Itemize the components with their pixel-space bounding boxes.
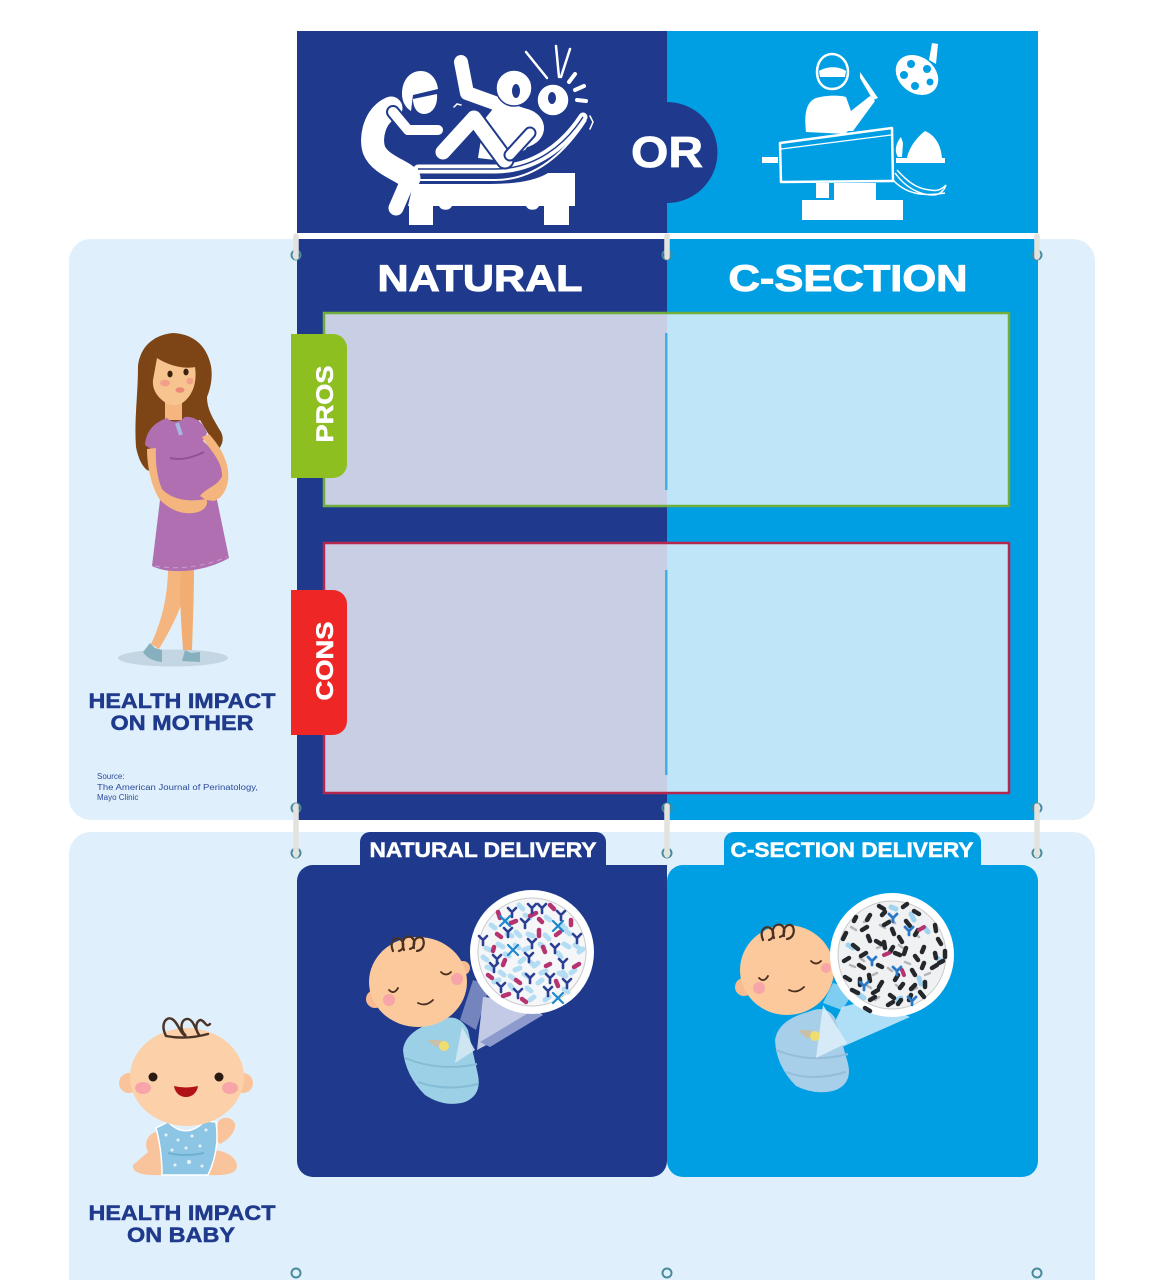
rings: [292, 236, 1042, 1278]
ear: [735, 978, 753, 996]
illustration: c-section delivery baby with microbiome: [735, 893, 954, 1092]
panel: health impact on baby: [69, 832, 1095, 1280]
ear: [366, 990, 384, 1008]
hair back: [135, 333, 223, 476]
magnifier beam: [460, 980, 490, 1030]
tab: natural delivery: [360, 832, 606, 865]
heading: health impact on baby: ON BABY: [127, 1223, 235, 1247]
body panel: c-section column: [667, 239, 1038, 820]
head: [369, 937, 467, 1027]
body panel: natural column: [297, 239, 667, 820]
source text: [97, 772, 258, 802]
tab: c-section delivery: C-SECTION DELIVERY: [730, 839, 974, 862]
shoes: [143, 643, 200, 662]
heading: c-section: C-SECTION: [728, 258, 968, 299]
midwife: [373, 71, 438, 208]
swaddle: [403, 1018, 479, 1104]
source text: Source:: [97, 772, 125, 781]
head: [740, 925, 834, 1015]
curls: [164, 1018, 210, 1038]
white band under header: [297, 233, 1038, 238]
pain rays: [454, 46, 593, 129]
arms: [147, 448, 207, 513]
mother in labour: [443, 62, 569, 160]
surgical drape screen: [780, 128, 893, 182]
source text: Mayo Clinic: [97, 793, 138, 802]
safety pin: [798, 1030, 816, 1038]
light microbes: [483, 905, 583, 1000]
light microbes: [848, 907, 941, 1000]
header panel: natural: [297, 31, 667, 233]
card: natural delivery: [297, 865, 667, 1177]
microscope lens: [470, 890, 594, 1014]
face: [389, 972, 451, 1004]
face: [148, 1072, 158, 1082]
heading: natural: NATURAL: [378, 258, 582, 299]
microscope lens: [830, 893, 954, 1017]
shadow: [118, 650, 228, 666]
source text: The American Journal of Perinatology,: [97, 783, 258, 792]
OR badge: [631, 102, 718, 203]
tab: cons: CONS: [312, 622, 339, 700]
legs: [151, 566, 190, 649]
head: [130, 1028, 244, 1126]
ears: [119, 1073, 139, 1093]
onesie: [156, 1121, 217, 1175]
icon: natural birth: [373, 46, 593, 225]
card: c-section delivery: [667, 865, 1038, 1177]
grey microbes: [850, 920, 930, 1000]
limbs: [133, 1118, 237, 1175]
eyes cheeks mouth: [167, 371, 173, 377]
face: [153, 358, 196, 405]
curls: [762, 925, 794, 940]
heading: health impact on mother: ON MOTHER: [110, 711, 254, 735]
tab: natural delivery: NATURAL DELIVERY: [370, 839, 596, 862]
OR badge: OR: [631, 128, 703, 177]
delivery bed: [408, 117, 586, 225]
illustration: natural delivery baby with microbiome: [366, 890, 594, 1104]
swaddle: [775, 1009, 849, 1092]
face: [759, 961, 821, 991]
safety pin: [427, 1040, 446, 1047]
heading: health impact on baby: HEALTH IMPACT: [88, 1201, 276, 1225]
tab: c-section delivery: [724, 832, 981, 865]
surgical lamp: [888, 43, 946, 103]
magenta microbes: [488, 905, 579, 1002]
icon: c-section surgery: [762, 43, 946, 220]
tab: cons: [291, 590, 347, 735]
antibodies: [479, 904, 581, 998]
cons box: [324, 543, 1009, 793]
tab: pros: [291, 334, 347, 478]
dress: [145, 417, 229, 571]
magnifier beam: [823, 983, 855, 1010]
operating table: [762, 157, 945, 220]
pros box: [324, 313, 1009, 506]
illustration: happy baby: [119, 1018, 253, 1175]
tab: pros: PROS: [312, 366, 339, 442]
hair front: [153, 336, 208, 372]
magenta microbes: [884, 927, 924, 975]
panel: health impact on mother: [69, 239, 1095, 820]
header panel: c-section: [667, 31, 1038, 233]
antibodies: [860, 914, 916, 1005]
neck: [165, 398, 182, 420]
black microbes: [843, 904, 945, 1011]
patient head: [896, 131, 942, 158]
heading: health impact on mother: HEALTH IMPACT: [88, 689, 276, 713]
surgeon: [805, 54, 878, 134]
curls: [392, 937, 424, 951]
illustration: pregnant mother: [118, 333, 229, 666]
